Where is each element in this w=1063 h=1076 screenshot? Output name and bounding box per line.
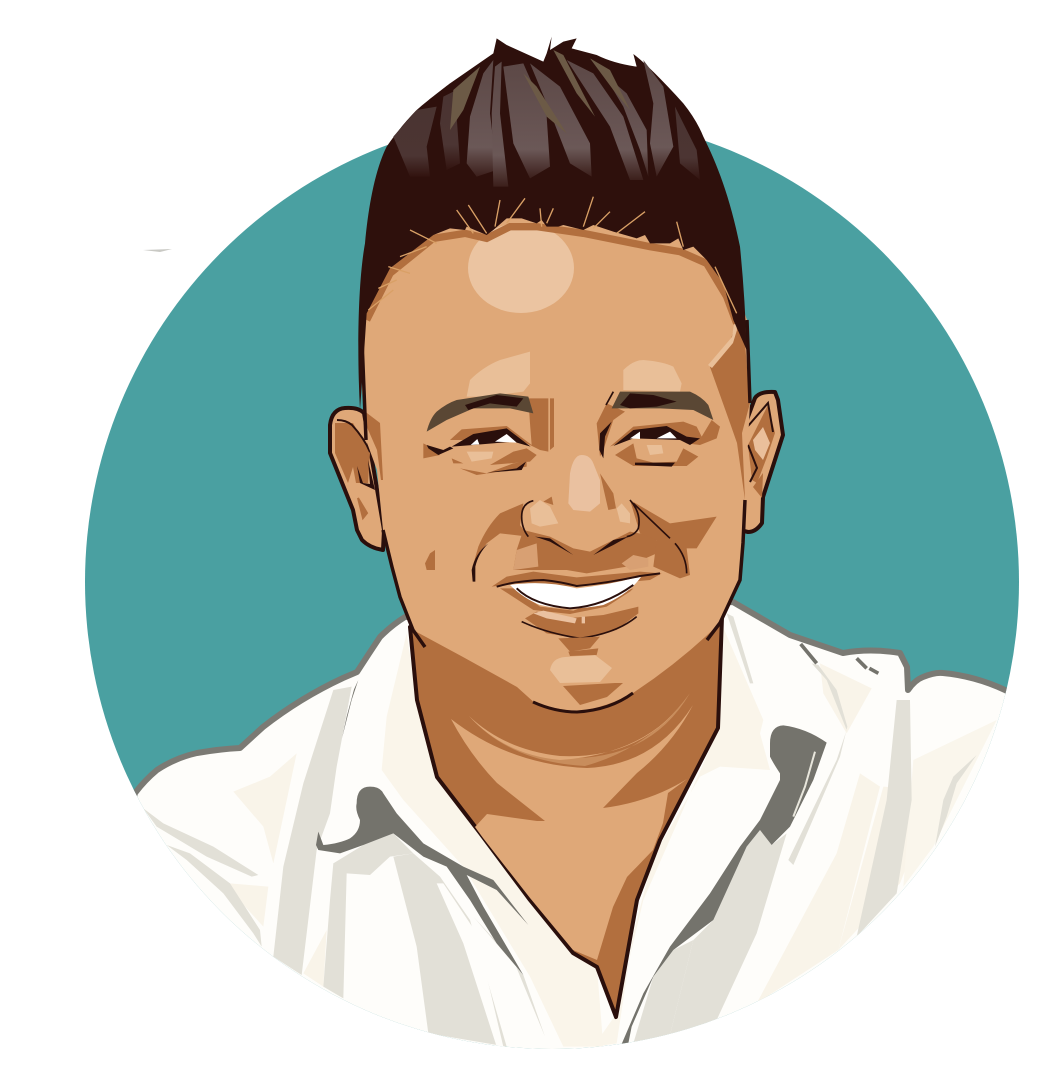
right temple shadow	[710, 317, 750, 500]
chin highlight	[550, 655, 612, 683]
right ear	[740, 392, 783, 532]
hair mass	[358, 37, 747, 410]
left eye under folds	[423, 443, 537, 475]
jaw outlines	[362, 320, 750, 647]
background circle	[85, 115, 1019, 1049]
chest skin	[451, 705, 693, 960]
upper lip area	[513, 530, 657, 573]
facial features	[423, 352, 720, 656]
neck shadow base	[410, 600, 722, 1017]
right eyebrow	[612, 392, 713, 420]
hair streaks	[393, 60, 700, 187]
forehead highlight	[468, 223, 574, 313]
hairline wisps	[368, 197, 737, 313]
left brow highlight	[467, 352, 530, 397]
hairline shadow	[367, 227, 737, 323]
lower mouth shadow	[500, 588, 633, 614]
nose shadows	[543, 473, 616, 510]
left smile crease	[472, 503, 528, 570]
upper lip	[492, 572, 662, 587]
right brow highlight	[623, 360, 682, 392]
left eye	[452, 428, 531, 447]
right smile crease	[630, 500, 717, 578]
right collar shadow	[622, 725, 827, 1044]
mouth lines	[497, 573, 660, 608]
right eye socket	[597, 403, 625, 457]
right shirt folds	[593, 613, 997, 1047]
chin shadow	[563, 683, 623, 705]
left ear	[330, 408, 384, 550]
nose highlight	[568, 455, 600, 512]
left collar shadow	[316, 787, 528, 975]
left ear shadow	[363, 410, 383, 480]
left shirt folds	[143, 633, 603, 1047]
neck and chest	[410, 600, 722, 1017]
collarbone highlight	[469, 693, 690, 766]
stray mark	[143, 249, 172, 252]
nose and crease lines	[522, 500, 687, 573]
face	[362, 160, 750, 712]
lower lip	[525, 607, 638, 638]
shirt body	[134, 599, 1007, 1049]
left eye socket	[450, 398, 548, 452]
cheek mark	[425, 550, 435, 570]
hair	[358, 37, 747, 410]
under lip shadow	[558, 637, 600, 656]
chin jaw line	[533, 693, 633, 712]
shoulder crease	[342, 680, 358, 738]
nose wing highlights	[530, 500, 630, 527]
olive hair tints	[450, 50, 630, 133]
teeth	[510, 576, 642, 608]
left eyebrow	[427, 393, 533, 432]
shirt	[134, 599, 1007, 1049]
right eye	[613, 426, 700, 446]
right eye under folds	[615, 443, 698, 466]
face base	[362, 160, 750, 712]
shoulder seam marks	[801, 644, 878, 673]
